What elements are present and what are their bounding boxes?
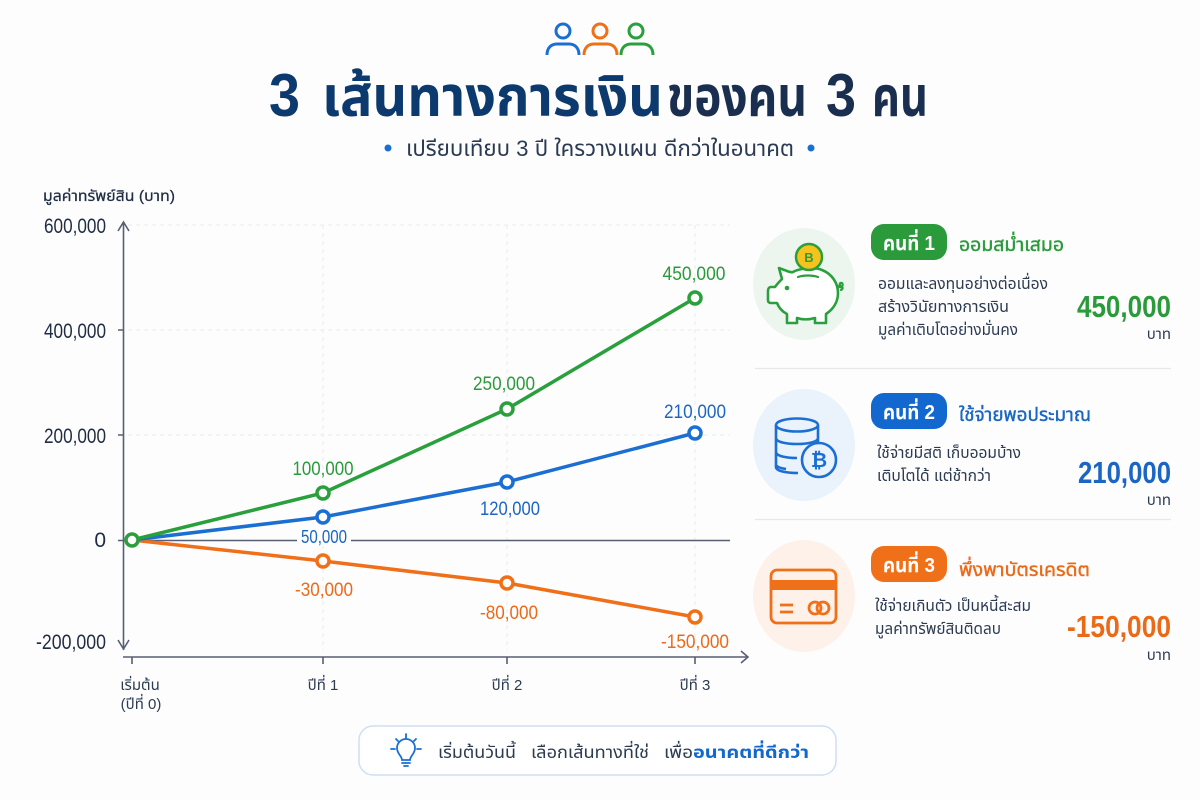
icon: piggy bank: B xyxy=(804,250,814,265)
value: 450,000 xyxy=(1077,289,1171,324)
panel: person 2 xyxy=(753,389,1171,509)
series: orange: -150,000 xyxy=(661,632,729,653)
callout: อนาคตที่ดีกว่า xyxy=(693,740,809,762)
x axis labels: เริ่มต้น xyxy=(120,675,160,694)
callout: เลือกเส้นทางที่ใช่ xyxy=(531,740,649,762)
series: green: 250,000 xyxy=(473,374,535,395)
description: มูลค่าเติบโตอย่างมั่นคง xyxy=(878,319,1018,339)
badge: คนที่ 2 xyxy=(883,398,935,424)
x axis labels: (ปีที่ 0) xyxy=(121,693,161,713)
description xyxy=(875,594,1031,638)
heading: ใช้จ่ายพอประมาณ xyxy=(959,403,1091,426)
callout: เพื่อ xyxy=(664,740,693,762)
title xyxy=(269,62,928,129)
description: ใช้จ่ายมีสติ เก็บออมบ้าง xyxy=(877,444,1021,462)
y axis labels: -200,000 xyxy=(36,631,106,654)
x axis labels: ปีที่ 1 xyxy=(308,674,338,694)
description: ออมและลงทุนอย่างต่อเนื่อง xyxy=(878,272,1048,293)
badge xyxy=(871,546,947,582)
title: 3 xyxy=(269,62,300,129)
series: orange: -80,000 xyxy=(480,603,538,624)
y axis labels: 400,000 xyxy=(44,320,106,343)
unit: บาท xyxy=(1147,492,1171,509)
badge xyxy=(871,393,947,429)
series: orange xyxy=(132,540,729,653)
description xyxy=(878,272,1048,339)
series: green: 450,000 xyxy=(662,264,726,285)
panel: person 1 xyxy=(753,224,1171,343)
callout: เริ่มต้นวันนี้ xyxy=(438,740,516,762)
heading: ออมสม่ำเสมอ xyxy=(959,231,1064,256)
description: ใช้จ่ายเกินตัว เป็นหนี้สะสม xyxy=(875,594,1031,615)
title: ของคน xyxy=(667,65,807,128)
y axis labels: 600,000 xyxy=(44,215,106,238)
series: blue xyxy=(132,402,726,547)
y axis title: มูลค่าทรัพย์สิน (บาท) xyxy=(43,187,175,205)
description: สร้างวินัยทางการเงิน xyxy=(878,299,1009,316)
description: เติบโตได้ แต่ช้ากว่า xyxy=(877,467,991,485)
panel: person 3 xyxy=(753,540,1171,664)
callout xyxy=(359,726,836,775)
series: orange: -30,000 xyxy=(295,580,353,601)
icon: credit card xyxy=(753,540,855,652)
chart gridlines xyxy=(128,225,730,650)
icon: piggy bank xyxy=(753,228,855,340)
y axis xyxy=(118,222,730,650)
badge: คนที่ 3 xyxy=(883,551,935,577)
icon: coins xyxy=(753,389,855,501)
series: blue: 50,000 xyxy=(301,527,347,547)
description xyxy=(877,444,1021,485)
title: คน xyxy=(872,65,928,128)
title: 3 xyxy=(826,62,856,129)
y axis labels: 0 xyxy=(94,529,106,552)
x axis labels xyxy=(120,674,710,713)
value: 210,000 xyxy=(1078,455,1171,490)
series: blue: 120,000 xyxy=(480,499,540,520)
heading: พึ่งพาบัตรเครดิต xyxy=(959,556,1090,581)
series: blue: 210,000 xyxy=(664,402,726,423)
badge xyxy=(871,224,947,260)
description: มูลค่าทรัพย์สินติดลบ xyxy=(875,620,1001,638)
x axis xyxy=(123,651,748,664)
unit: บาท xyxy=(1147,326,1171,343)
y axis labels xyxy=(36,215,106,654)
unit: บาท xyxy=(1147,647,1171,664)
value: -150,000 xyxy=(1067,609,1171,644)
title: เส้นทางการเงิน xyxy=(322,65,663,128)
y axis labels: 200,000 xyxy=(44,425,106,448)
x axis labels: ปีที่ 3 xyxy=(680,674,710,694)
icon: three people xyxy=(547,24,653,55)
icon: light bulb xyxy=(391,734,421,766)
x axis labels: ปีที่ 2 xyxy=(492,674,522,694)
subtitle: เปรียบเทียบ 3 ปี ใครวางแผน ดีกว่าในอนาคต xyxy=(406,136,794,161)
badge: คนที่ 1 xyxy=(883,229,935,255)
series: green: 100,000 xyxy=(292,459,354,480)
series: green xyxy=(126,264,726,546)
line chart xyxy=(36,187,748,713)
icon: coins: ₿ xyxy=(811,450,827,472)
